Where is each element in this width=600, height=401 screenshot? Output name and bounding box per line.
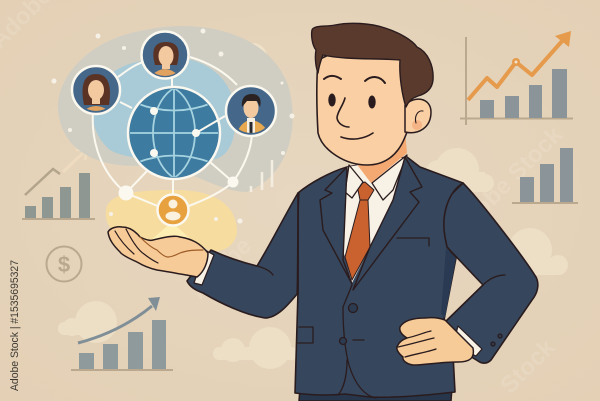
chart: middle right [512,148,578,204]
icon: dollar coin lower left: $ [58,252,70,277]
tie [345,182,374,280]
watermark: Adobe [185,232,257,304]
holding hand [108,227,208,277]
cloud: bottom centre [213,327,298,369]
collar [345,155,407,200]
watermark: Adobe Stock [445,121,568,244]
globe [128,87,225,179]
cloud: lower left [58,301,117,343]
watermark: Stock [495,333,561,399]
suit details [253,193,505,398]
head: features [324,76,385,139]
body shadow [285,240,456,318]
torso [295,157,463,397]
chart: upper left [22,149,95,220]
network connections [93,57,252,207]
avatar: bottom user icon [158,194,188,226]
hip hand [397,318,473,365]
shirt [343,157,407,283]
man [108,23,538,401]
small white dots [52,28,294,224]
head: ear [405,99,431,133]
icon: dollar coin lower left [46,246,82,282]
avatar: man right [226,86,276,136]
cloud: upper right [426,148,494,192]
network backdrop blobs [58,26,293,251]
network nodes [118,176,238,200]
head: face [317,40,412,165]
icon: dollar coin top [239,43,267,71]
trousers [299,388,452,401]
avatar: woman left [72,66,120,118]
left arm [187,193,298,318]
neck [352,130,407,183]
right cuff [453,326,482,356]
lapels [320,157,422,290]
left cuff [194,250,214,285]
decorative white bars [251,160,272,192]
watermark: Adobe Stock [295,266,418,389]
chart: lower left [71,297,173,371]
buttons [340,304,502,346]
head: hair [312,23,433,107]
chart: top right [460,31,573,125]
credit text: Adobe Stock | #1535695327 [9,260,21,391]
right arm (on hip) [430,183,538,363]
icon: dollar coin top: $ [249,50,258,67]
cloud: lower right [505,228,568,275]
avatar: woman top [142,32,188,80]
